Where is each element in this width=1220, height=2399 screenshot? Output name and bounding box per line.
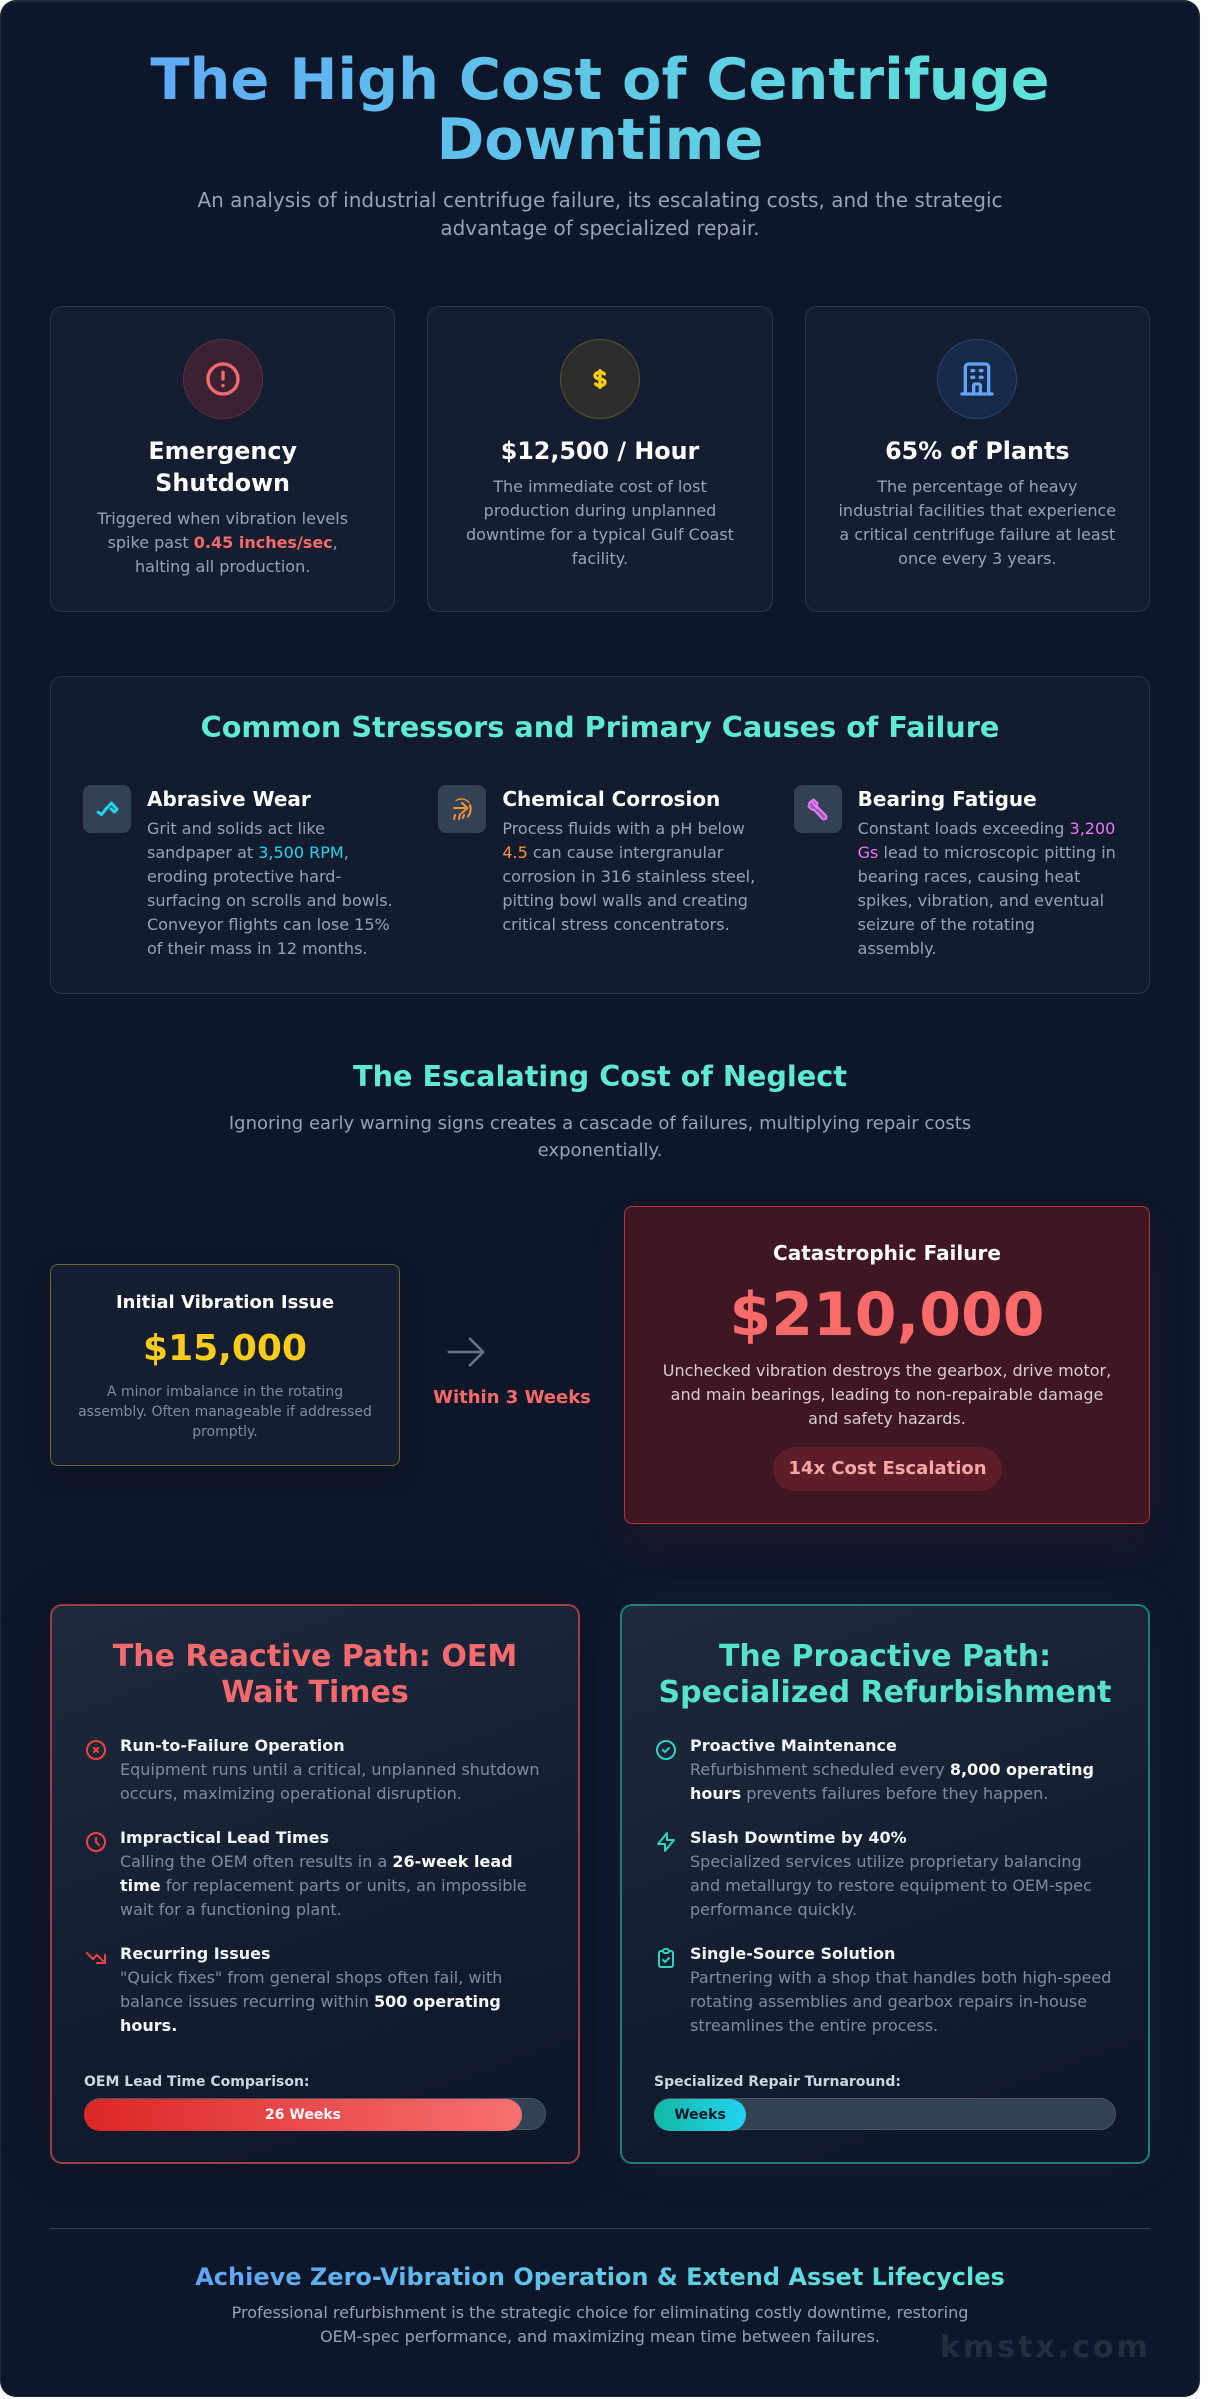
item text	[120, 1852, 527, 1919]
item text: Calling the OEM often results in a 26-week lead	[120, 1852, 513, 1871]
bar fill: weeks: Weeks	[674, 2107, 726, 2123]
card text	[663, 1361, 1111, 1428]
item heading: Single-Source Solution	[690, 1944, 895, 1963]
icon: dollar sign	[560, 339, 640, 419]
panel: proactive path	[620, 1604, 1150, 2164]
card text: once every 3 years.	[898, 549, 1056, 568]
card heading: Shutdown	[155, 469, 290, 497]
item text: Specialized services utilize proprietary balancing	[690, 1852, 1082, 1871]
card heading	[148, 437, 297, 497]
subtitle	[197, 188, 1003, 240]
bar label: Specialized Repair Turnaround:	[654, 2074, 901, 2090]
card text	[97, 509, 348, 576]
footer text	[232, 2303, 968, 2346]
panel: catastrophic failure	[624, 1206, 1150, 1524]
stressor text: Grit and solids act like	[147, 819, 325, 838]
icon: clock	[86, 1832, 106, 1852]
stressor text: assembly.	[858, 939, 936, 958]
item heading: Proactive Maintenance	[690, 1736, 897, 1755]
card text: spike past 0.45 inches/sec,	[108, 533, 338, 552]
item text: "Quick fixes" from general shops often fail, with	[120, 1968, 502, 1987]
stressor text: Conveyor flights can lose 15%	[147, 915, 390, 934]
icon: clipboard check	[658, 1948, 674, 1968]
stressor text: eroding protective hard-	[147, 867, 341, 886]
icon: exclamation circle	[183, 339, 263, 419]
section heading: Common Stressors and Primary Causes of Failure	[201, 710, 999, 744]
icon: lightning bolt	[657, 1832, 675, 1852]
panel: plants percentage card	[805, 306, 1150, 612]
card text: The percentage of heavy	[877, 477, 1077, 496]
item text: Partnering with a shop that handles both high-speed	[690, 1968, 1111, 1987]
card text: and main bearings, leading to non-repairable damage	[671, 1385, 1103, 1404]
subtitle: advantage of specialized repair.	[440, 216, 760, 240]
panel heading	[112, 1639, 517, 1710]
icon: chemical corrosion	[438, 785, 486, 833]
item text: performance quickly.	[690, 1900, 857, 1919]
item text: wait for a functioning plant.	[120, 1900, 342, 1919]
card text: Unchecked vibration destroys the gearbox, drive motor,	[663, 1361, 1111, 1380]
footer text: Professional refurbishment is the strategic choice for eliminating costly downtime, restoring	[232, 2303, 968, 2322]
bar chart: OEM lead time	[84, 2098, 546, 2130]
card text: A minor imbalance in the rotating	[107, 1384, 343, 1400]
section intro text: Ignoring early warning signs creates a cascade of failures, multiplying repair costs	[229, 1113, 971, 1134]
card text: promptly.	[192, 1424, 258, 1440]
bar fill: weeks	[654, 2099, 746, 2131]
stressor text: of their mass in 12 months.	[147, 939, 368, 958]
item text: rotating assemblies and gearbox repairs in-house	[690, 1992, 1087, 2011]
card text: a critical centrifuge failure at least	[839, 525, 1115, 544]
icon: check circle	[656, 1740, 676, 1760]
card text: halting all production.	[135, 557, 310, 576]
item heading: Impractical Lead Times	[120, 1828, 329, 1847]
arrow	[448, 1337, 484, 1367]
stressor text: Process fluids with a pH below	[502, 819, 745, 838]
stressor heading: Abrasive Wear	[147, 787, 311, 811]
card text	[838, 477, 1116, 568]
item text: and metallurgy to restore equipment to OEM-spec	[690, 1876, 1092, 1895]
card text: facility.	[572, 549, 628, 568]
list item: single source	[658, 1944, 1111, 2035]
item text: balance issues recurring within 500 operating	[120, 1992, 501, 2011]
section intro text: exponentially.	[538, 1140, 662, 1160]
card text: downtime for a typical Gulf Coast	[466, 525, 734, 544]
bar fill: 26 weeks: 26 Weeks	[265, 2107, 341, 2123]
card heading: Catastrophic Failure	[773, 1241, 1001, 1265]
stressor text: seizure of the rotating	[858, 915, 1035, 934]
card text	[466, 477, 734, 568]
escalation pill: 14x Cost Escalation	[788, 1458, 987, 1479]
stressor text	[858, 819, 1116, 958]
item heading: Recurring Issues	[120, 1944, 270, 1963]
stressor text	[147, 819, 393, 958]
stressor text: critical stress concentrators.	[502, 915, 730, 934]
footer text: OEM-spec performance, and maximizing mean time between failures.	[320, 2327, 880, 2346]
card heading: Emergency	[148, 437, 297, 465]
bar label: OEM Lead Time Comparison:	[84, 2074, 310, 2090]
icon: abrasive wear	[83, 785, 131, 833]
item text: Equipment runs until a critical, unplanned shutdown	[120, 1760, 540, 1779]
panel heading: The Proactive Path:	[719, 1639, 1051, 1674]
card text	[78, 1384, 372, 1440]
icon: office building	[937, 339, 1017, 419]
panel heading: Wait Times	[221, 1675, 409, 1710]
item heading: Slash Downtime by 40%	[690, 1828, 907, 1847]
title: The High Cost of Centrifuge	[150, 46, 1050, 113]
list item: run to failure	[86, 1736, 540, 1803]
panel heading	[659, 1639, 1111, 1710]
stressor text: corrosion in 316 stainless steel,	[502, 867, 755, 886]
watermark: kmstx.com	[940, 2330, 1151, 2365]
panel: initial vibration issue	[50, 1264, 400, 1466]
panel heading: The Reactive Path: OEM	[113, 1639, 517, 1674]
item text: Refurbishment scheduled every 8,000 operating	[690, 1760, 1094, 1779]
item text: streamlines the entire process.	[690, 2016, 938, 2035]
item text	[690, 1968, 1111, 2035]
card heading: 65% of Plants	[885, 437, 1070, 465]
card text: assembly. Often manageable if addressed	[78, 1404, 372, 1420]
stressor text	[502, 819, 755, 934]
item text: time for replacement parts or units, an impossible	[120, 1876, 527, 1895]
stressor text: Gs lead to microscopic pitting in	[858, 843, 1116, 862]
list item: slash downtime	[657, 1828, 1092, 1919]
stressor text: sandpaper at 3,500 RPM,	[147, 843, 349, 862]
subtitle: An analysis of industrial centrifuge failure, its escalating costs, and the strategic	[197, 188, 1003, 212]
icon: x circle	[86, 1740, 106, 1760]
stressor text: 4.5 can cause intergranular	[502, 843, 723, 862]
item text	[690, 1852, 1092, 1919]
bar fill: 26 weeks	[84, 2099, 522, 2131]
panel: common stressors	[50, 676, 1150, 994]
list item: lead times	[86, 1828, 527, 1919]
card heading: Initial Vibration Issue	[116, 1292, 334, 1313]
panel: reactive path	[50, 1604, 580, 2164]
title: Downtime	[437, 106, 763, 173]
arrow label: Within 3 Weeks	[433, 1387, 591, 1408]
card heading: $12,500 / Hour	[501, 437, 699, 465]
icon: bearing fatigue	[794, 785, 842, 833]
section intro text	[229, 1113, 971, 1160]
card text: production during unplanned	[484, 501, 716, 520]
panel heading: Specialized Refurbishment	[659, 1675, 1111, 1710]
list item: proactive maintenance	[656, 1736, 1094, 1803]
title	[50, 50, 1150, 170]
card text: and safety hazards.	[808, 1409, 966, 1428]
list item: recurring issues	[86, 1944, 502, 2035]
card text: industrial facilities that experience	[838, 501, 1116, 520]
escalation pill	[773, 1447, 1002, 1491]
item heading: Run-to-Failure Operation	[120, 1736, 345, 1755]
stressor text: pitting bowl walls and creating	[502, 891, 748, 910]
item text: hours prevents failures before they happen.	[690, 1784, 1048, 1803]
item text	[120, 1968, 502, 2035]
item text: hours.	[120, 2016, 177, 2035]
cost figure: $210,000	[729, 1280, 1045, 1350]
stressor text: surfacing on scrolls and bowls.	[147, 891, 393, 910]
item text: occurs, maximizing operational disruption.	[120, 1784, 462, 1803]
stressor text: Constant loads exceeding 3,200	[858, 819, 1115, 838]
panel: hourly cost card	[427, 306, 773, 612]
stressor text: spikes, vibration, and eventual	[858, 891, 1104, 910]
stressor text: bearing races, causing heat	[858, 867, 1080, 886]
stressor heading: Chemical Corrosion	[502, 787, 720, 811]
footer heading: Achieve Zero-Vibration Operation & Extend Asset Lifecycles	[195, 2263, 1005, 2291]
section heading: escalating cost: The Escalating Cost of Neglect	[353, 1059, 847, 1093]
item text	[690, 1760, 1094, 1803]
card text: The immediate cost of lost	[493, 477, 707, 496]
cost figure: $15,000	[143, 1328, 307, 1369]
panel: emergency shutdown card	[50, 306, 395, 612]
card text: Triggered when vibration levels	[97, 509, 348, 528]
icon: trending down	[86, 1952, 106, 1964]
bar chart: specialized turnaround	[654, 2098, 1116, 2130]
stressor heading: Bearing Fatigue	[858, 787, 1037, 811]
item text	[120, 1760, 540, 1803]
